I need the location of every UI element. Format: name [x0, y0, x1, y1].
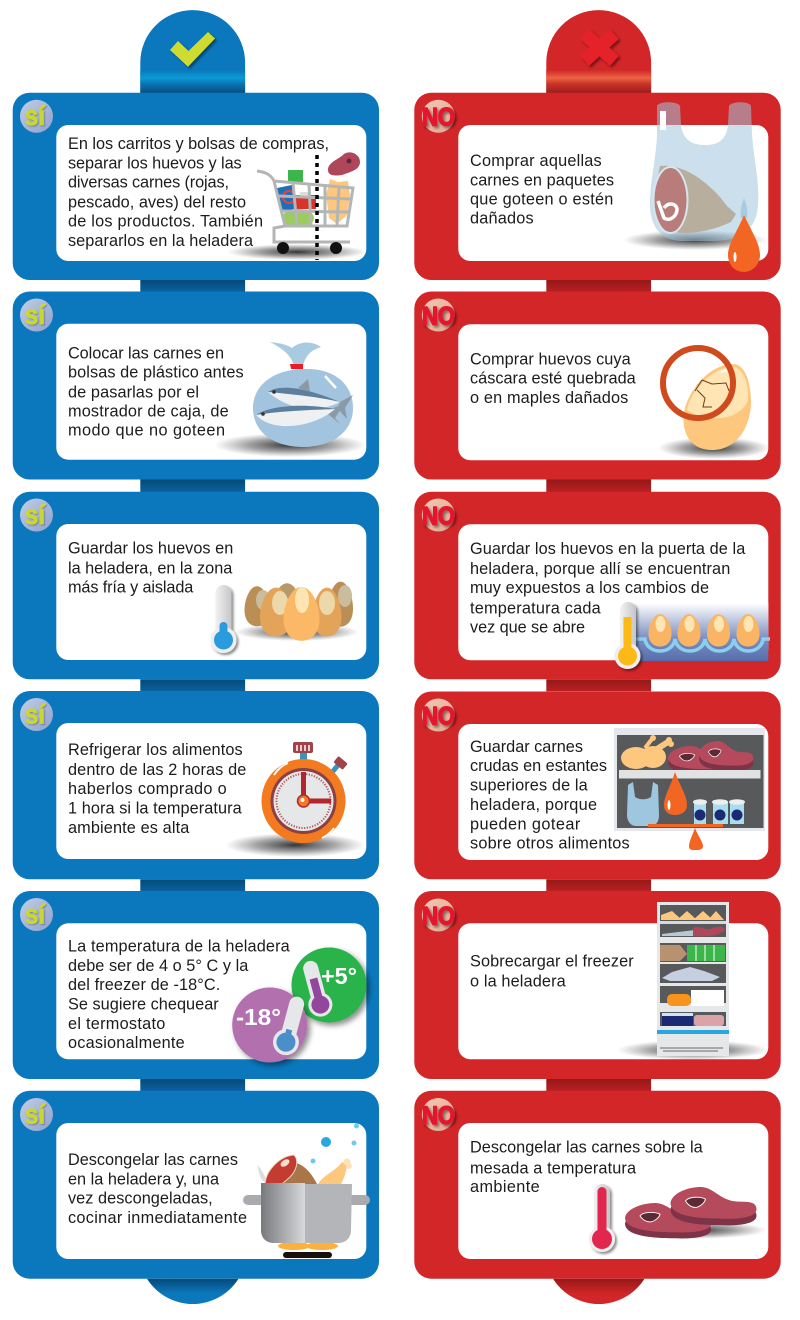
text block: ambiente es alta — [68, 819, 190, 837]
text block: La temperatura de la heladera — [68, 937, 291, 955]
text block: sobre otros alimentos — [470, 834, 630, 852]
icon: shopping cart with separated products — [227, 152, 367, 260]
text block: dañados — [470, 210, 534, 228]
text block — [470, 1139, 704, 1196]
badge: sí: sí — [25, 499, 46, 530]
text block — [68, 937, 291, 1052]
column: SÍ header tab — [140, 10, 245, 94]
text block: debe ser de 4 o 5° C y la — [68, 957, 249, 975]
text block: que goteen o estén — [470, 190, 613, 208]
text block: vez descongeladas, — [68, 1189, 213, 1207]
text block: separar los huevos y las — [68, 154, 242, 172]
icon: overloaded display fridge — [617, 902, 769, 1060]
text block: o la heladera — [470, 973, 567, 991]
badge: sí — [20, 898, 53, 931]
text block: cáscara esté quebrada — [470, 369, 637, 387]
panel: sí 4 — [13, 691, 379, 879]
text block — [470, 953, 634, 991]
text block: mostrador de caja, de — [68, 402, 229, 420]
text block — [68, 135, 329, 250]
text block — [68, 741, 246, 837]
connectors: left column — [140, 280, 245, 1091]
text block: heladera, porque — [470, 796, 597, 814]
bottom cap: right — [553, 1279, 644, 1304]
panel: no 1 — [414, 93, 781, 280]
text block: En los carritos y bolsas de compras, — [68, 135, 329, 153]
text block: de pasarlas por el — [68, 383, 199, 401]
text block: Comprar aquellas — [470, 152, 602, 170]
text block: crudas en estantes — [470, 757, 607, 775]
panel: sí 1 — [13, 93, 379, 280]
icon: green badge +5 degrees: +5° — [321, 963, 357, 989]
text block: en la heladera y, una — [68, 1170, 220, 1188]
icon: check mark — [170, 32, 215, 67]
panel: no 2 — [414, 292, 781, 480]
badge: sí — [20, 498, 53, 532]
icon: thermometer, cold — [210, 585, 236, 653]
icon: raw steaks on counter — [623, 1187, 767, 1239]
text block: separarlos en la heladera — [68, 232, 254, 250]
icon: group of eggs — [235, 582, 359, 641]
text block: carnes en paquetes — [470, 171, 614, 189]
text block: del freezer de -18°C. — [68, 976, 220, 994]
text block — [470, 350, 637, 407]
text block: 1 hora si la temperatura — [68, 800, 243, 818]
panel: no 4 — [414, 692, 781, 879]
text block: dentro de las 2 horas de — [68, 761, 246, 779]
panel: no 3 — [414, 492, 781, 679]
text block: muy expuestos a los cambios de — [470, 579, 709, 597]
text block: de los productos. También — [68, 213, 263, 231]
text block: el termostato — [68, 1015, 165, 1033]
text block: superiores de la — [470, 776, 589, 794]
badge: sí: sí — [25, 299, 46, 330]
text block: Guardar los huevos en — [68, 539, 233, 557]
text block: Guardar los huevos en la puerta de la — [470, 540, 746, 558]
text block: Descongelar las carnes sobre la — [470, 1139, 704, 1157]
panel: no 6 — [414, 1091, 781, 1279]
icon: green badge +5 degrees — [292, 948, 366, 1022]
panel: no 5 — [414, 891, 781, 1079]
text block: modo que no goteen — [68, 421, 225, 439]
text block: mesada a temperatura — [470, 1159, 637, 1177]
text block: Se sugiere chequear — [68, 995, 219, 1013]
badge: sí: sí — [25, 1098, 46, 1130]
icon: fish in plastic bag — [214, 342, 366, 457]
icon: purple badge -18 degrees: -18° — [236, 1004, 281, 1030]
icon: pot with meat and steam — [243, 1124, 370, 1258]
text block: Refrigerar los alimentos — [68, 741, 243, 759]
column: NO header tab — [546, 10, 651, 94]
icon: leaking plastic bag with ham — [623, 102, 767, 272]
icon: cracked egg with ring — [658, 348, 770, 459]
text block: bolsas de plástico antes — [68, 363, 244, 381]
badge: sí — [20, 298, 53, 332]
text block: heladera, porque allí se encuentran — [470, 560, 730, 578]
text block: la heladera, en la zona — [68, 559, 233, 577]
text block — [68, 1151, 247, 1227]
text block: pescado, aves) del resto — [68, 193, 246, 211]
text block: Sobrecargar el freezer — [470, 953, 634, 971]
badge: sí: sí — [25, 100, 46, 131]
text block: diversas carnes (rojas, — [68, 174, 229, 192]
icon: thermometer, hot — [589, 1184, 615, 1252]
badge: no: NO — [422, 104, 455, 132]
badge: no: NO — [422, 902, 455, 930]
icon: fridge shelves with dripping meat — [614, 728, 765, 850]
text block: Guardar carnes — [470, 738, 583, 756]
text block: vez que se abre — [470, 618, 585, 636]
text block — [68, 344, 244, 439]
badge: no: NO — [422, 502, 455, 530]
badge: sí — [20, 100, 53, 133]
icon: cross mark — [580, 29, 619, 66]
panel: sí 5 — [13, 891, 379, 1079]
badge: no: NO — [422, 702, 455, 730]
text block: Colocar las carnes en — [68, 344, 224, 362]
panel: sí 2 — [13, 292, 379, 480]
badge: sí — [20, 698, 53, 731]
text block: Descongelar las carnes — [68, 1151, 238, 1169]
text block — [470, 152, 614, 228]
text block: ocasionalmente — [68, 1034, 185, 1052]
text block: Comprar huevos cuya — [470, 350, 632, 368]
badge: no: NO — [422, 1102, 455, 1130]
text block: ambiente — [470, 1178, 540, 1196]
text block: o en maples dañados — [470, 389, 628, 407]
text block — [470, 738, 630, 852]
badge: no: NO — [422, 302, 455, 330]
text block: temperatura cada — [470, 599, 602, 617]
panel: sí 6 — [13, 1091, 379, 1279]
icon: purple badge -18 degrees — [232, 988, 311, 1062]
text block: pueden gotear — [470, 815, 581, 833]
text block: haberlos comprado o — [68, 780, 227, 798]
text block: cocinar inmediatamente — [68, 1209, 247, 1227]
text block — [470, 540, 746, 636]
icon: stopwatch — [225, 742, 365, 857]
bottom cap: left — [147, 1279, 238, 1304]
icon: thermometer, warm — [614, 602, 640, 669]
badge: sí — [20, 1098, 53, 1131]
badge: sí: sí — [25, 898, 46, 930]
connectors: right column — [546, 280, 651, 1091]
text block: más fría y aislada — [68, 578, 194, 596]
icon: egg tray in fridge door — [634, 603, 770, 661]
badge: sí: sí — [25, 698, 46, 730]
panel: sí 3 — [13, 492, 379, 679]
text block — [68, 539, 233, 596]
